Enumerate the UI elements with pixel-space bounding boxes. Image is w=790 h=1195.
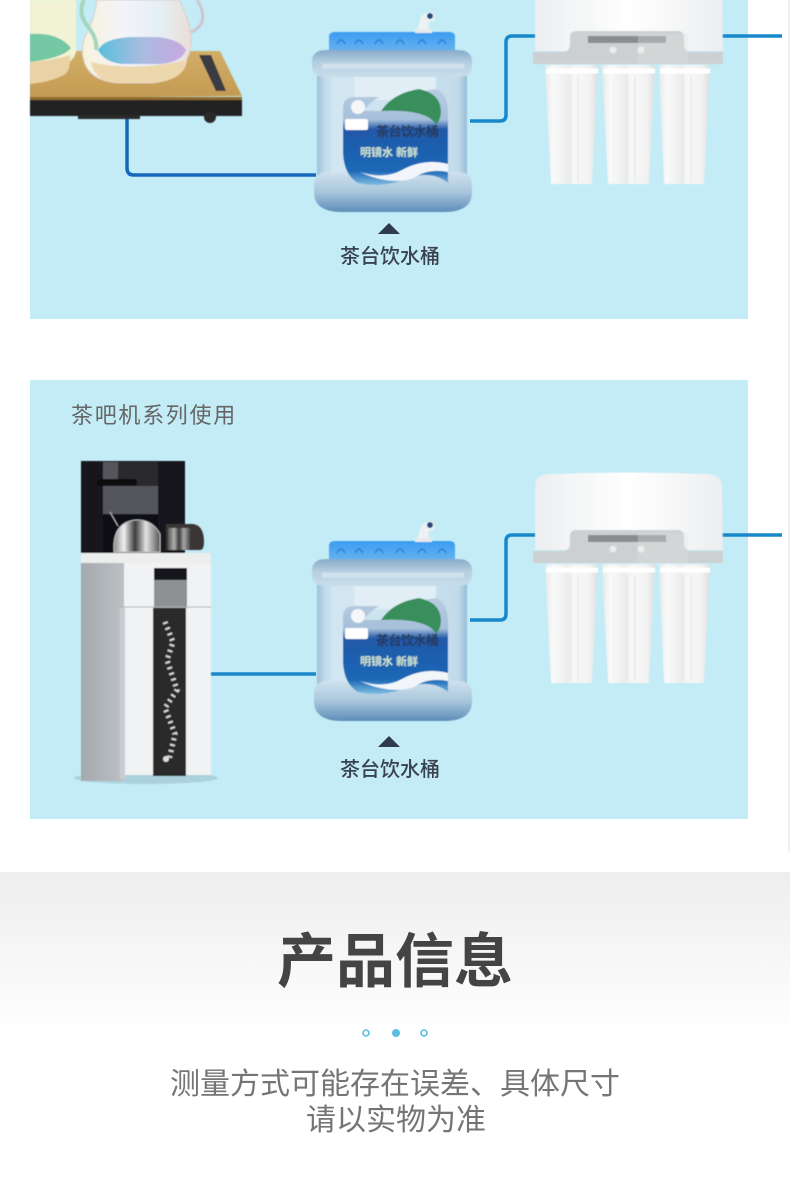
heading: product info: 产品信息 (277, 929, 513, 995)
icon: water jug: 明镜水 新鲜 (360, 654, 418, 668)
icon: water jug (312, 521, 472, 721)
section: product info (0, 872, 790, 1137)
pipe: purifier outlet (720, 34, 782, 38)
pipe: purifier outlet (720, 533, 782, 537)
jug label text: 茶台饮水桶 (376, 633, 439, 648)
icon: tea bar machine (74, 461, 218, 784)
label: jug: 茶台饮水桶 (340, 245, 440, 268)
pipe: table to jug (127, 118, 316, 175)
pipe: machine to jug (208, 672, 316, 676)
arrow up (378, 736, 400, 747)
label: jug: 茶台饮水桶 (340, 758, 440, 781)
icon: right kettle (81, 0, 203, 83)
panel: tea bar machine series (30, 380, 782, 819)
icon: water jug: 明镜水 新鲜 (360, 145, 418, 159)
arrow up (378, 223, 400, 234)
dots decoration (363, 1029, 427, 1037)
right edge line (788, 0, 790, 852)
pipe: jug to purifier (470, 535, 536, 620)
icon: left kettle (30, 0, 76, 84)
panel: tea table series (30, 0, 782, 319)
pipe: jug to purifier (470, 36, 536, 121)
text: measurement note: 测量方式可能存在误差、具体尺寸 (170, 1068, 620, 1101)
text: measurement note (170, 1068, 620, 1137)
icon: tea table with kettles (30, 0, 242, 123)
jug label text: 茶台饮水桶 (376, 124, 439, 139)
text: measurement note: 请以实物为准 (306, 1104, 486, 1137)
icon: RO purifier (533, 0, 723, 184)
heading: tea bar machine: 茶吧机系列使用 (71, 403, 237, 428)
icon: water jug (312, 12, 472, 212)
icon: RO purifier (533, 472, 723, 683)
